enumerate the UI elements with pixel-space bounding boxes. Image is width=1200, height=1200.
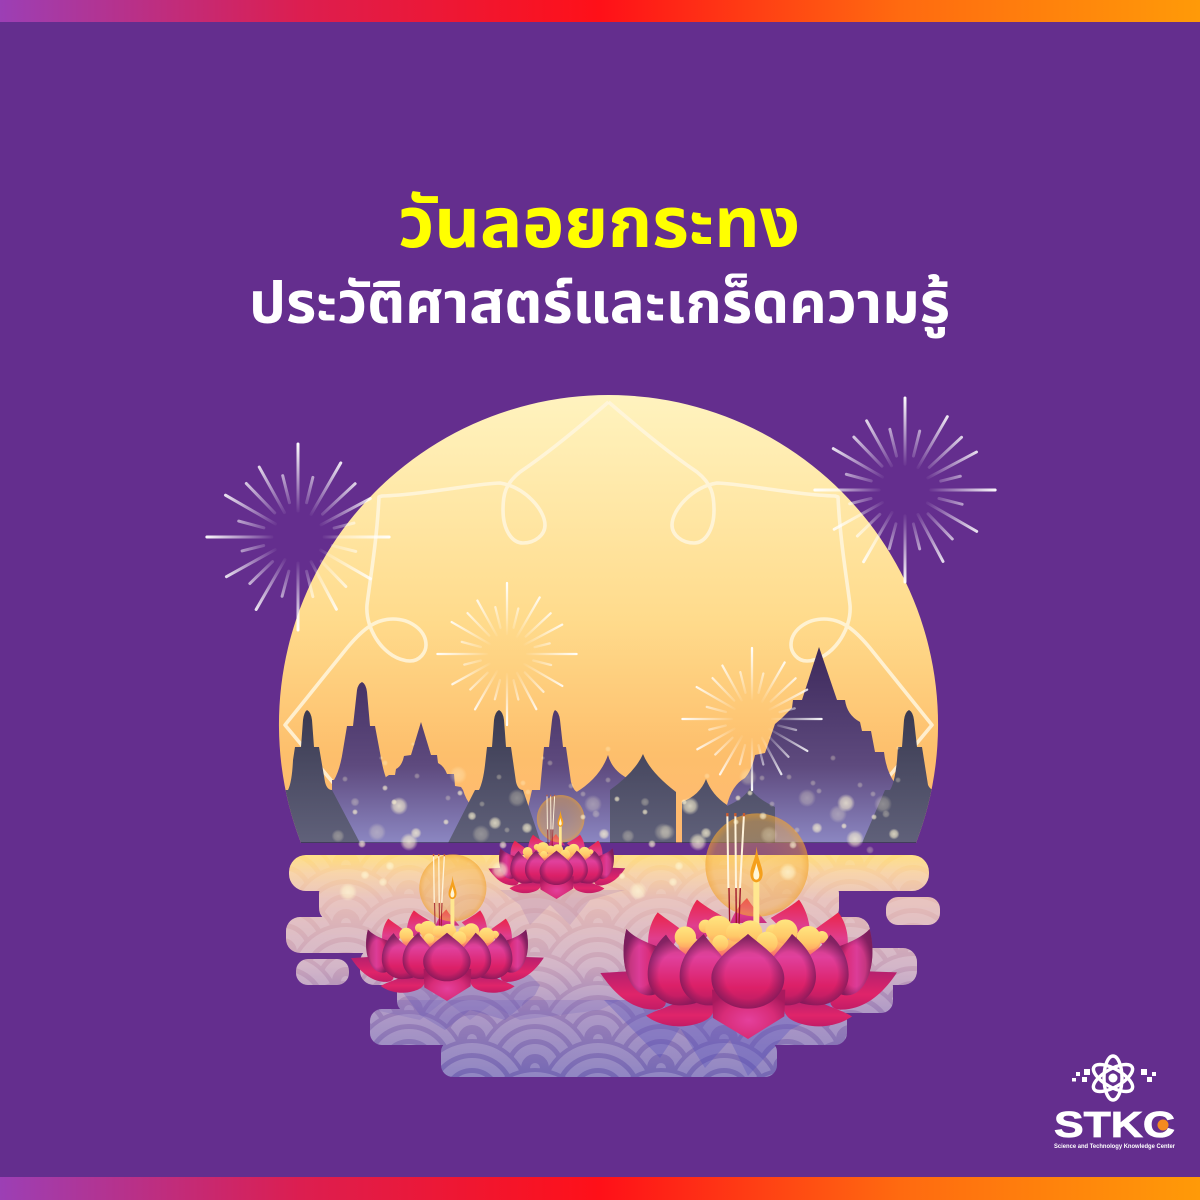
firework: right [815,398,995,582]
temple silhouettes [270,647,935,843]
icon: atom [1089,1056,1137,1100]
logo orange dot [1158,1120,1168,1130]
STKC logo [1054,1056,1175,1150]
bokeh light particles [332,742,901,901]
floating krathong: left [351,854,544,1001]
floating krathong: front [600,813,897,1039]
firework: over stupa [682,648,822,790]
krathong line ornament on moon [285,402,932,785]
firework: moon centre [437,583,577,725]
subtitle: ประวัติศาสตร์และเกร็ดความรู้ [249,271,950,339]
floating krathong: back [488,795,625,899]
full moon [279,395,938,843]
bottom gradient bar [0,1177,1200,1200]
river with wave pattern [286,855,940,1077]
logo pixel squares [1072,1069,1156,1082]
title: วันลอยกระทง [398,184,800,262]
logo tagline: Science and Technology Knowledge Center [1054,1143,1175,1150]
firework: left [207,444,389,630]
logo wordmark: STKC [1054,1104,1175,1145]
top gradient bar [0,0,1200,22]
